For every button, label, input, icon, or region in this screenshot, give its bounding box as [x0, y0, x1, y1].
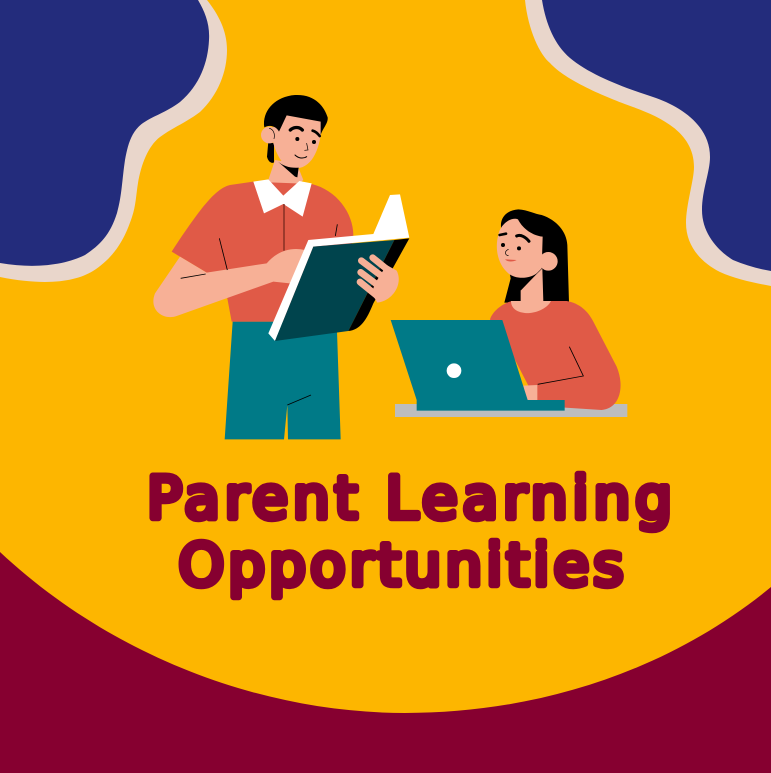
face — [273, 115, 322, 168]
desk — [395, 404, 627, 417]
shirt placket — [282, 204, 286, 251]
book cover — [275, 240, 394, 341]
ear — [539, 252, 558, 271]
long hair — [501, 209, 569, 303]
book spine — [348, 238, 409, 331]
neck — [268, 160, 303, 196]
wrist — [523, 385, 537, 401]
back hair — [267, 142, 274, 163]
sleeve crease — [538, 347, 583, 384]
illustration: woman with laptop — [391, 209, 627, 417]
mouth — [505, 259, 517, 262]
trousers — [225, 322, 341, 439]
title line 1: Parent Learning — [147, 464, 672, 532]
arm — [153, 249, 305, 317]
facial features — [500, 234, 529, 256]
book pages — [268, 194, 409, 341]
eyes — [501, 243, 521, 250]
eyes — [295, 137, 316, 144]
neck shadow — [278, 162, 299, 177]
hand on book — [360, 258, 399, 303]
shirt — [172, 182, 353, 322]
illustration: man reading a book — [153, 95, 409, 439]
top-right blob — [525, 0, 771, 286]
bottom maroon wave — [0, 552, 771, 773]
hair — [264, 95, 328, 135]
shirt crease lines — [181, 224, 337, 405]
collar — [253, 179, 312, 217]
title — [147, 464, 672, 599]
neckline — [511, 301, 551, 313]
ear — [261, 127, 278, 143]
laptop — [391, 320, 565, 411]
title line 2: Opportunities — [178, 531, 624, 599]
sweater — [490, 301, 621, 410]
facial features — [269, 127, 320, 158]
neck — [521, 268, 543, 302]
laptop logo — [447, 363, 461, 378]
top-left blob — [0, 0, 227, 282]
face — [497, 219, 543, 278]
